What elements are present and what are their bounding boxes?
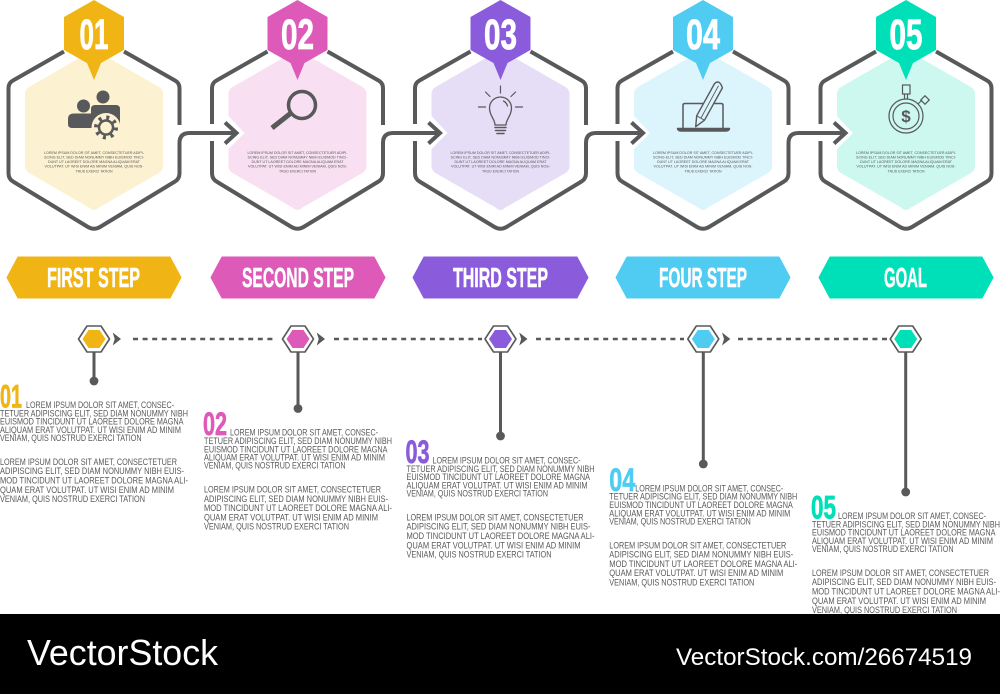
text block 01: ALIQUAM ERAT VOLUTPAT. UT WISI ENIM AD MINIM: [0, 425, 181, 435]
timeline node 04: [688, 326, 730, 468]
text block 04: QUAM ERAT VOLUTPAT. UT WISI ENIM AD MINIM: [609, 568, 783, 578]
description text: [856, 150, 957, 174]
description text: DUNT UT LAOREET DOLORE MAGNA ALIQUAM ERAT: [657, 159, 750, 164]
text block 02: MOD TINCIDUNT UT LAOREET DOLORE MAGNA ALI-: [204, 503, 392, 513]
hexagon outline: [415, 52, 586, 229]
icon: light bulb: [478, 86, 522, 134]
text block 05: 05: [811, 490, 836, 526]
text block 04: [609, 462, 797, 587]
text block 04: VENIAM, QUIS NOSTRUD EXERCI TATION: [609, 577, 754, 587]
hexagon tinted fill: [432, 50, 570, 210]
footer watermark bar: VectorStock.com/26674519: [676, 644, 972, 671]
text block 02: EUISMOD TINCIDUNT UT LAOREET DOLORE MAGNA: [204, 444, 388, 454]
text block 01: TETUER ADIPISCING ELIT, SED DIAM NONUMMY NIBH: [0, 408, 188, 418]
text block 05: VENIAM, QUIS NOSTRUD EXERCI TATION: [812, 605, 957, 615]
description text: LOREM IPSUM DOLOR SIT AMET, CONSECTETUER ADIPI-: [653, 150, 754, 155]
text block 03: LOREM IPSUM DOLOR SIT AMET, CONSEC-: [432, 456, 580, 466]
number badge: 02: [281, 11, 314, 59]
hexagon outline: [212, 52, 383, 229]
panel: step 01 hexagon: [8, 0, 180, 229]
description text: DUNT UT LAOREET DOLORE MAGNA ALIQUAM ERAT: [454, 159, 547, 164]
text block 04: ALIQUAM ERAT VOLUTPAT. UT WISI ENIM AD MINIM: [609, 508, 790, 518]
banner: goal: GOAL: [884, 262, 927, 293]
hexagon outline: [618, 52, 788, 229]
text block 04: ADIPISCING ELIT, SED DIAM NONUMMY NIBH EUIS-: [609, 550, 793, 560]
text block 01: MOD TINCIDUNT UT LAOREET DOLORE MAGNA ALI-: [0, 476, 188, 486]
description text: VOLUTPAT. UT WISI ENIM AD MINIM VENIAM, QUIS NOS-: [248, 164, 348, 168]
text block 02: VENIAM, QUIS NOSTRUD EXERCI TATION: [204, 522, 349, 532]
description text: LOREM IPSUM DOLOR SIT AMET, CONSECTETUER ADIPI-: [44, 150, 145, 155]
description text: [44, 150, 145, 174]
description text: SCING ELIT, SED DIAM NONUMMY NIBH EUISMOD TINCI-: [44, 154, 145, 160]
description text: TRUD EXERCI TATION: [684, 168, 722, 174]
description text: LOREM IPSUM DOLOR SIT AMET, CONSECTETUER ADIPI-: [450, 150, 551, 155]
arrow: step 01 to 02: [180, 122, 236, 150]
description text: VOLUTPAT. UT WISI ENIM AD MINIM VENIAM, QUIS NOS-: [44, 164, 144, 168]
arrow: step 03 to 04: [586, 122, 643, 150]
description text: DUNT UT LAOREET DOLORE MAGNA ALIQUAM ERAT: [252, 159, 344, 164]
description text: LOREM IPSUM DOLOR SIT AMET, CONSECTETUER ADIPI-: [856, 150, 957, 155]
arrow notch: [836, 115, 853, 150]
text block 03: [406, 434, 594, 560]
text block 02: QUAM ERAT VOLUTPAT. UT WISI ENIM AD MINIM: [204, 512, 378, 522]
footer watermark bar: [0, 614, 1000, 694]
description text: TRUD EXERCI TATION: [888, 168, 925, 174]
arrow notch: [228, 115, 244, 150]
text block 03: 03: [406, 434, 430, 470]
number badge: 05: [890, 11, 922, 59]
description text: SCING ELIT, SED DIAM NONUMMY NIBH EUISMOD TINCI-: [248, 154, 348, 160]
text block 01: LOREM IPSUM DOLOR SIT AMET, CONSECTETUER: [0, 457, 177, 467]
text block 02: ALIQUAM ERAT VOLUTPAT. UT WISI ENIM AD MINIM: [204, 453, 385, 463]
text block 01: QUAM ERAT VOLUTPAT. UT WISI ENIM AD MINIM: [0, 485, 174, 495]
hexagon tinted fill: [25, 50, 163, 210]
text block 02: 02: [203, 406, 227, 442]
icon: people with gear: [68, 90, 120, 142]
banner: third step: [413, 257, 588, 298]
number badge: [673, 0, 733, 80]
text block 01: VENIAM, QUIS NOSTRUD EXERCI TATION: [0, 494, 145, 504]
text block 03: TETUER ADIPISCING ELIT, SED DIAM NONUMMY NIBH: [406, 464, 594, 474]
text block 01: ADIPISCING ELIT, SED DIAM NONUMMY NIBH EUIS-: [0, 466, 184, 476]
hexagon outline: [8, 52, 180, 229]
hexagon tinted fill: [228, 50, 366, 210]
description text: VOLUTPAT. UT WISI ENIM AD MINIM VENIAM, QUIS NOS-: [856, 164, 956, 168]
text block 04: VENIAM, QUIS NOSTRUD EXERCI TATION: [609, 516, 751, 526]
text block 01: [0, 378, 188, 504]
description text: LOREM IPSUM DOLOR SIT AMET, CONSECTETUER ADIPI-: [248, 150, 348, 155]
description text: [450, 150, 551, 174]
banner: goal: [819, 257, 993, 298]
hexagon outline: [820, 52, 992, 229]
text block 02: VENIAM, QUIS NOSTRUD EXERCI TATION: [204, 461, 346, 471]
text block 04: EUISMOD TINCIDUNT UT LAOREET DOLORE MAGNA: [609, 500, 793, 510]
description text: TRUD EXERCI TATION: [76, 168, 113, 174]
description text: DUNT UT LAOREET DOLORE MAGNA ALIQUAM ERAT: [860, 159, 953, 164]
text block 03: MOD TINCIDUNT UT LAOREET DOLORE MAGNA ALI-: [406, 531, 594, 541]
banner: four step: FOUR STEP: [659, 262, 747, 293]
banner: second step: [211, 257, 385, 298]
description text: TRUD EXERCI TATION: [482, 168, 519, 174]
number badge: 01: [80, 11, 108, 59]
text block 03: LOREM IPSUM DOLOR SIT AMET, CONSECTETUER: [406, 512, 584, 522]
text block 05: VENIAM, QUIS NOSTRUD EXERCI TATION: [812, 544, 954, 554]
text block 03: VENIAM, QUIS NOSTRUD EXERCI TATION: [406, 488, 548, 498]
banner: four step: [616, 257, 790, 298]
description text: VOLUTPAT. UT WISI ENIM AD MINIM VENIAM, QUIS NOS-: [654, 164, 753, 168]
text block 04: TETUER ADIPISCING ELIT, SED DIAM NONUMMY NIBH: [609, 492, 797, 502]
text block 01: 01: [0, 378, 22, 414]
text block 02: ADIPISCING ELIT, SED DIAM NONUMMY NIBH EUIS-: [204, 494, 388, 504]
description text: VOLUTPAT. UT WISI ENIM AD MINIM VENIAM, QUIS NOS-: [451, 164, 551, 168]
text block 03: QUAM ERAT VOLUTPAT. UT WISI ENIM AD MINIM: [406, 540, 580, 550]
text block 02: TETUER ADIPISCING ELIT, SED DIAM NONUMMY NIBH: [204, 436, 392, 446]
footer watermark bar: VectorStock: [27, 632, 219, 673]
banner: first step: FIRST STEP: [47, 262, 140, 293]
number badge: [64, 0, 124, 80]
description text: SCING ELIT, SED DIAM NONUMMY NIBH EUISMOD TINCI-: [856, 154, 957, 160]
timeline node 03: [485, 326, 528, 440]
hexagon tinted fill: [634, 50, 772, 210]
banner: third step: THIRD STEP: [453, 262, 548, 293]
description text: [248, 150, 348, 174]
number badge: [470, 0, 530, 80]
text block 04: LOREM IPSUM DOLOR SIT AMET, CONSEC-: [635, 483, 783, 493]
text block 02: LOREM IPSUM DOLOR SIT AMET, CONSECTETUER: [204, 485, 381, 495]
text block 04: 04: [609, 462, 635, 498]
number badge: 04: [686, 11, 720, 59]
timeline node 02: [282, 326, 325, 413]
arrow notch: [430, 115, 448, 150]
text block 04: MOD TINCIDUNT UT LAOREET DOLORE MAGNA ALI-: [609, 559, 797, 569]
text block 03: ALIQUAM ERAT VOLUTPAT. UT WISI ENIM AD MINIM: [406, 480, 588, 490]
icon: stopwatch with dollar: $: [901, 107, 911, 126]
banner: first step: [7, 257, 181, 298]
text block 04: LOREM IPSUM DOLOR SIT AMET, CONSECTETUER: [609, 540, 787, 550]
text block 03: ADIPISCING ELIT, SED DIAM NONUMMY NIBH EUIS-: [406, 522, 590, 532]
timeline node 01: [78, 326, 121, 385]
text block 03: EUISMOD TINCIDUNT UT LAOREET DOLORE MAGNA: [406, 472, 590, 482]
description text: SCING ELIT, SED DIAM NONUMMY NIBH EUISMOD TINCI-: [653, 154, 754, 160]
icon: magnifying glass: [272, 92, 316, 128]
description text: DUNT UT LAOREET DOLORE MAGNA ALIQUAM ERAT: [48, 159, 141, 164]
description text: [653, 150, 754, 174]
icon: stopwatch with dollar: [889, 85, 929, 133]
hexagon tinted fill: [837, 50, 975, 210]
description text: TRUD EXERCI TATION: [279, 168, 316, 174]
icon: laptop and pencil: [677, 82, 730, 132]
text block 03: VENIAM, QUIS NOSTRUD EXERCI TATION: [406, 550, 552, 560]
panel: step 03 hexagon: [415, 0, 586, 229]
text block 01: VENIAM, QUIS NOSTRUD EXERCI TATION: [0, 433, 142, 443]
arrow: step 04 to 05: [788, 122, 846, 150]
text block 05: [811, 490, 1000, 615]
text block 01: LOREM IPSUM DOLOR SIT AMET, CONSEC-: [26, 400, 174, 410]
number badge: 03: [484, 11, 517, 59]
text block 02: LOREM IPSUM DOLOR SIT AMET, CONSEC-: [230, 428, 378, 438]
text block 02: [203, 406, 392, 532]
panel: step 02 hexagon: [212, 0, 383, 229]
banner: second step: SECOND STEP: [242, 262, 354, 293]
arrow notch: [633, 115, 650, 150]
number badge: [876, 0, 936, 80]
panel: step 04 hexagon: [618, 0, 788, 229]
description text: SCING ELIT, SED DIAM NONUMMY NIBH EUISMOD TINCI-: [450, 154, 551, 160]
arrow: step 02 to 03: [383, 122, 440, 150]
timeline dashed connectors: [133, 338, 887, 340]
text block 01: EUISMOD TINCIDUNT UT LAOREET DOLORE MAGNA: [0, 417, 184, 427]
number badge: [268, 0, 328, 80]
panel: step 05 hexagon: [820, 0, 992, 229]
timeline node 05: [890, 326, 921, 496]
